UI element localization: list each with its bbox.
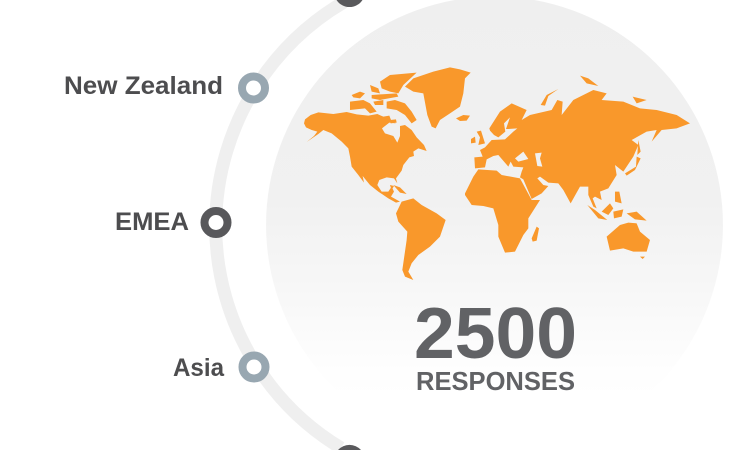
label: Asia: Asia xyxy=(173,354,225,382)
label: New Zealand: New Zealand xyxy=(64,72,223,100)
label: EMEA: EMEA xyxy=(115,208,189,236)
top node xyxy=(336,0,362,7)
bottom node xyxy=(338,445,361,450)
outer ring arc xyxy=(216,2,344,448)
Asia node xyxy=(242,356,266,378)
globe background circle xyxy=(266,0,723,450)
map: Americas and Greenland xyxy=(304,67,471,280)
map: Europe, Asia, Africa, Australia xyxy=(465,76,690,259)
world map xyxy=(304,67,690,280)
caption: RESPONSES xyxy=(416,366,575,396)
big number: 2500 xyxy=(414,294,577,374)
EMEA node xyxy=(204,211,228,234)
New Zealand node xyxy=(242,76,265,100)
